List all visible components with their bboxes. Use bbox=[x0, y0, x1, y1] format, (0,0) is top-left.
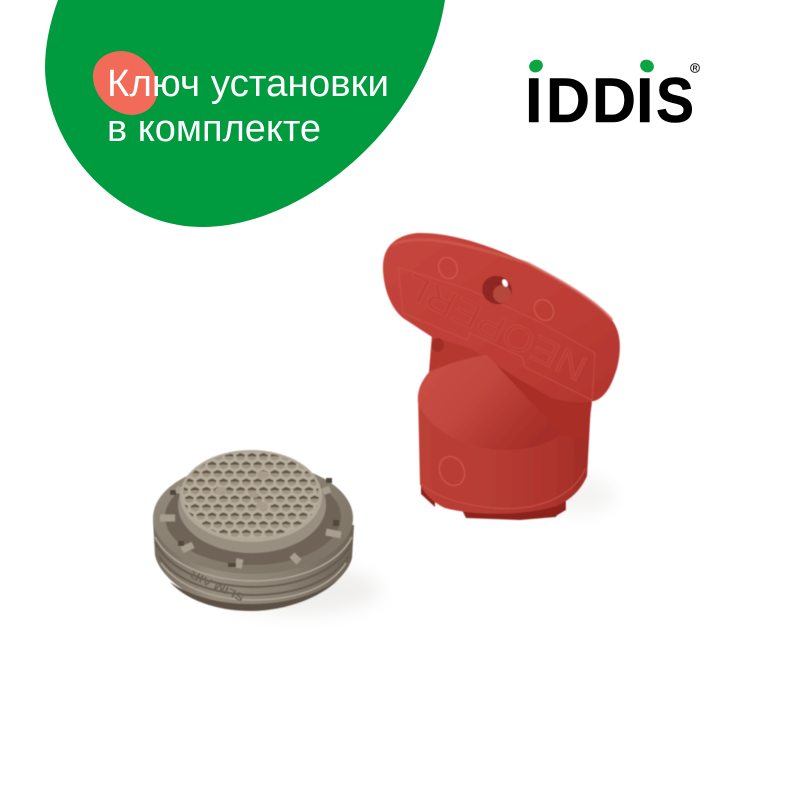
key oval head bbox=[383, 233, 620, 402]
green blob shape bbox=[45, 0, 445, 227]
key cylinder body bbox=[418, 385, 591, 514]
key base notches bbox=[421, 486, 566, 520]
product photo: grey aerator bbox=[153, 450, 380, 614]
aerator inner cylinder bbox=[178, 457, 326, 553]
key shadow bbox=[535, 477, 615, 513]
logo wordmark: I bbox=[525, 66, 543, 136]
key head upper rim highlight bbox=[392, 240, 612, 320]
aerator bottom dark edge bbox=[170, 580, 338, 611]
aerator thread grooves bbox=[155, 542, 352, 595]
heading text: в комплекте bbox=[107, 108, 321, 150]
logo: IDDIS bbox=[525, 57, 699, 136]
key embossed circles bbox=[435, 254, 558, 490]
aerator honeycomb disc bbox=[183, 452, 320, 537]
coral accent blob bbox=[93, 51, 158, 115]
aerator ring spokes bbox=[160, 470, 341, 568]
logo wordmark: S bbox=[656, 66, 694, 136]
key small hole bbox=[432, 338, 444, 352]
aerator engraved text: SLIM AIR bbox=[189, 568, 246, 603]
registered mark bbox=[691, 64, 699, 73]
aerator window marks bbox=[170, 478, 339, 567]
key stem behind head bbox=[429, 335, 490, 372]
product photo: red installation key bbox=[383, 233, 620, 520]
logo green dot right bbox=[638, 57, 656, 75]
aerator outer ring bbox=[153, 462, 353, 574]
key cone bbox=[418, 355, 561, 450]
aerator shadow bbox=[220, 566, 380, 614]
aerator ring recess bbox=[165, 469, 341, 565]
key cylinder lower ring bbox=[422, 468, 586, 509]
panel: green heading blob bbox=[45, 0, 445, 227]
logo wordmark: D bbox=[546, 66, 590, 136]
logo wordmark: D bbox=[592, 66, 636, 136]
aerator lower body bbox=[153, 520, 354, 611]
key cylinder right slot bbox=[573, 403, 590, 492]
aerator disc rim bbox=[180, 450, 322, 542]
key wall between head and cone bbox=[465, 340, 592, 440]
heading text: Ключ установки bbox=[107, 63, 389, 105]
key embossed label: NEOPERL bbox=[398, 265, 594, 390]
key hole bbox=[477, 271, 517, 309]
registered mark: R bbox=[692, 66, 698, 73]
aerator thread highlights bbox=[155, 537, 352, 600]
logo green dot left bbox=[527, 57, 545, 75]
logo wordmark: I bbox=[636, 66, 654, 136]
